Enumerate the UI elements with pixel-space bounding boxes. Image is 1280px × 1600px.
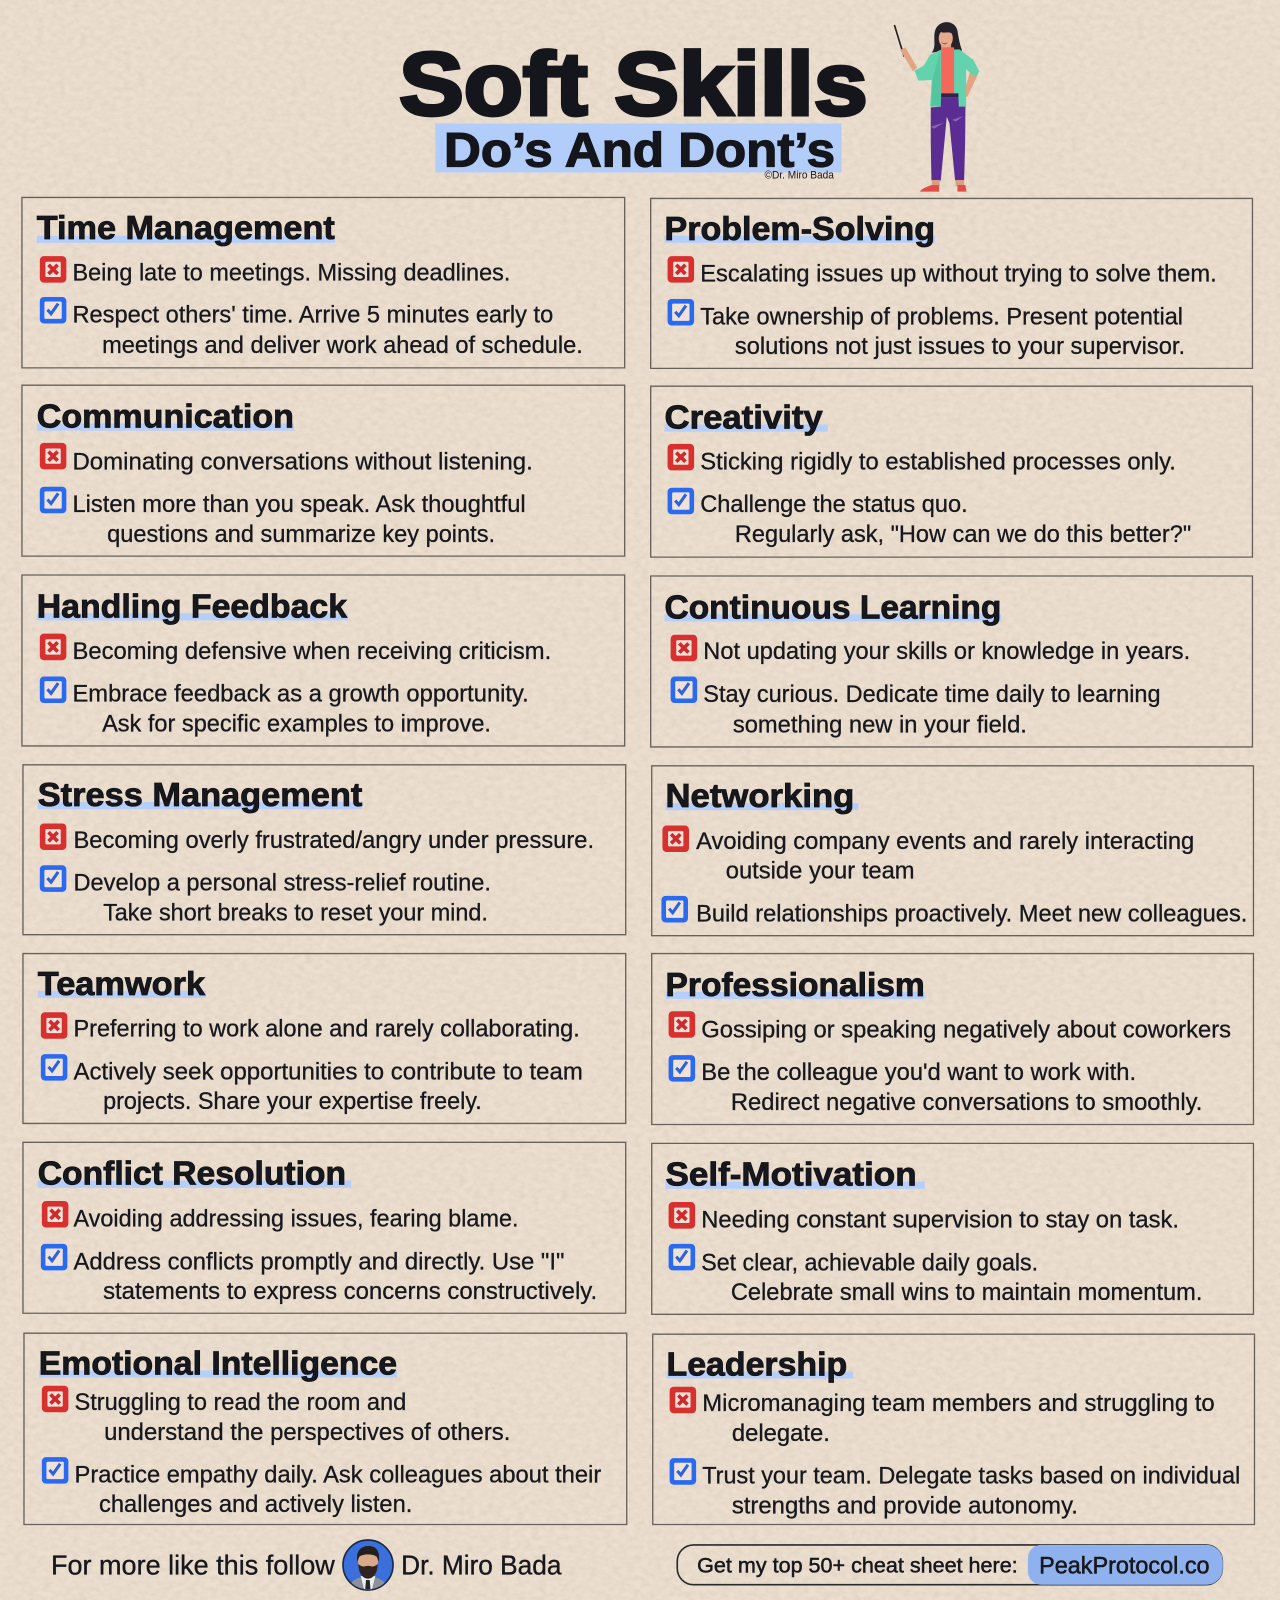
do text: Ask for specific examples to improve. [102, 711, 491, 738]
don't text: outside your team [726, 858, 915, 885]
do text [700, 303, 1185, 360]
link button [1028, 1545, 1223, 1585]
icon: blue check [40, 677, 66, 703]
footer: follow line [51, 1540, 562, 1592]
do text: challenges and actively listen. [99, 1491, 412, 1518]
heading: Leadership: Leadership [667, 1347, 847, 1384]
icon: red cross [669, 1011, 695, 1038]
panel: Emotional Intelligence [24, 1333, 627, 1524]
panel: Handling Feedback [22, 575, 625, 746]
don't text: understand the perspectives of others. [104, 1419, 510, 1446]
don't text: Sticking rigidly to established processes only. [700, 448, 1176, 475]
do text [702, 1463, 1240, 1519]
icon: author portrait [343, 1540, 393, 1592]
don't text: Micromanaging team members and struggling to [702, 1390, 1215, 1417]
icon: blue check [668, 488, 694, 514]
don't text: Dominating conversations without listening. [72, 448, 533, 475]
do text: Redirect negative conversations to smoothly. [731, 1089, 1202, 1116]
icon: blue check [670, 1458, 696, 1485]
do text: solutions not just issues to your supervisor. [735, 333, 1185, 360]
do text [73, 1248, 597, 1305]
don't text: Not updating your skills or knowledge in years. [703, 638, 1190, 665]
heading: Communication: Communication [37, 399, 294, 436]
panel: Networking [652, 766, 1253, 936]
icon: blue check [669, 1055, 695, 1082]
don't text: Becoming defensive when receiving criticism. [72, 638, 551, 665]
subtitle with highlight: Do’s And Dont’s [444, 124, 835, 177]
footer: follow line: For more like this follow [51, 1549, 335, 1580]
panel: Leadership [653, 1334, 1254, 1524]
do text: Take ownership of problems. Present potential [700, 303, 1183, 330]
don't text: Avoiding addressing issues, fearing blame. [73, 1206, 519, 1233]
do text: Address conflicts promptly and directly. Use "I" [73, 1248, 564, 1275]
icon: blue check [40, 297, 66, 323]
do text: projects. Share your expertise freely. [103, 1088, 482, 1115]
icon: red cross [42, 1386, 68, 1412]
icon: blue check [40, 865, 66, 892]
do text: Set clear, achievable daily goals. [701, 1249, 1038, 1276]
heading: Stress Management: Stress Management [38, 777, 362, 814]
footer: call to action pill [677, 1545, 1223, 1585]
icon: blue check [668, 299, 694, 326]
panel: Stress Management [23, 765, 626, 935]
don't text [702, 1390, 1215, 1447]
heading: Creativity: Creativity [664, 400, 823, 437]
illustration: teacher with pointer [894, 22, 979, 192]
do text: Stay curious. Dedicate time daily to learning [703, 681, 1161, 708]
icon: red cross [668, 256, 694, 283]
icon: blue check [671, 677, 697, 703]
don't text: Avoiding company events and rarely interacting [696, 828, 1194, 855]
heading: Conflict Resolution: Conflict Resolution [38, 1156, 346, 1193]
icon: red cross [668, 444, 694, 470]
icon: red cross [40, 823, 66, 850]
icon: blue check [669, 1244, 695, 1270]
heading: Problem-Solving: Problem-Solving [664, 211, 935, 248]
don't text: Preferring to work alone and rarely collaborating. [73, 1016, 580, 1043]
do text [75, 1462, 601, 1518]
do text: Practice empathy daily. Ask colleagues about their [75, 1462, 601, 1489]
heading: Continuous Learning: Continuous Learning [664, 589, 1001, 626]
copyright credit: ©Dr. Miro Bada [765, 170, 834, 182]
don't text: Becoming overly frustrated/angry under pressure. [73, 827, 594, 854]
don't text [75, 1389, 510, 1446]
do text [703, 681, 1161, 739]
do text: Actively seek opportunities to contribute to team [73, 1059, 583, 1086]
panel: Conflict Resolution [23, 1142, 626, 1313]
icon: red cross [669, 1202, 695, 1229]
icon: red cross [40, 443, 66, 469]
do text: Embrace feedback as a growth opportunity. [72, 681, 529, 708]
panel: Problem-Solving [651, 198, 1252, 368]
footer: follow line: Dr. Miro Bada [401, 1549, 562, 1580]
don't text: delegate. [732, 1420, 830, 1447]
do text [701, 1249, 1202, 1306]
icon: red cross [40, 634, 66, 660]
don't text: Escalating issues up without trying to solve them. [700, 261, 1217, 288]
do text [73, 1059, 583, 1115]
footer: call to action pill: Get my top 50+ cheat sheet here: [697, 1553, 1018, 1577]
icon: red cross [40, 256, 66, 283]
panel: Professionalism [652, 954, 1253, 1124]
do text: something new in your field. [733, 712, 1027, 739]
icon: blue check [41, 1244, 67, 1270]
icon: red cross [670, 1387, 696, 1413]
icon: red cross [42, 1201, 68, 1228]
do text [72, 301, 583, 359]
heading: Time Management: Time Management [37, 210, 335, 247]
do text: Take short breaks to reset your mind. [103, 899, 488, 926]
do text: Listen more than you speak. Ask thoughtful [72, 491, 526, 518]
do text [701, 1059, 1202, 1116]
do text [700, 491, 1191, 548]
don't text [696, 828, 1194, 885]
do text: Regularly ask, "How can we do this better?" [735, 521, 1191, 548]
icon: blue check [661, 896, 688, 922]
title: Soft Skills [399, 34, 868, 133]
do text: Build relationships proactively. Meet new colleagues. [696, 900, 1247, 927]
do text [72, 681, 529, 738]
do text: Respect others' time. Arrive 5 minutes early to [72, 301, 553, 328]
do text: Celebrate small wins to maintain momentum. [731, 1279, 1202, 1306]
panel: Continuous Learning [651, 576, 1252, 747]
icon: red cross [662, 826, 689, 852]
do text: Develop a personal stress-relief routine. [73, 869, 491, 896]
do text: strengths and provide autonomy. [732, 1492, 1078, 1519]
heading: Networking: Networking [666, 778, 854, 815]
do text [73, 869, 491, 926]
icon: red cross [671, 635, 697, 661]
do text: Trust your team. Delegate tasks based on individual [702, 1463, 1240, 1490]
don't text: Gossiping or speaking negatively about coworkers [701, 1017, 1231, 1044]
heading: Self-Motivation: Self-Motivation [666, 1157, 917, 1194]
panel: Communication [22, 385, 625, 556]
don't text: Needing constant supervision to stay on task. [701, 1207, 1179, 1234]
do text: Be the colleague you'd want to work with. [701, 1059, 1136, 1086]
don't text: Struggling to read the room and [75, 1389, 406, 1416]
heading: Teamwork: Teamwork [38, 966, 206, 1003]
icon: blue check [40, 487, 66, 513]
heading: Handling Feedback: Handling Feedback [37, 588, 348, 625]
panel: Self-Motivation [652, 1143, 1253, 1314]
do text: statements to express concerns constructively. [103, 1278, 597, 1305]
heading: Professionalism: Professionalism [666, 967, 925, 1004]
icon: blue check [42, 1457, 68, 1484]
icon: blue check [41, 1054, 67, 1081]
panel: Creativity [651, 386, 1252, 557]
panel: Time Management [22, 197, 625, 368]
heading: Emotional Intelligence: Emotional Intelligence [39, 1345, 397, 1382]
do text: questions and summarize key points. [107, 521, 495, 548]
do text: meetings and deliver work ahead of schedule. [102, 332, 583, 359]
do text [72, 491, 526, 548]
panel: Teamwork [23, 954, 626, 1123]
icon: red cross [41, 1012, 67, 1039]
don't text: Being late to meetings. Missing deadlines. [72, 260, 510, 287]
link button: PeakProtocol.co [1039, 1552, 1210, 1579]
do text: Challenge the status quo. [700, 491, 968, 518]
